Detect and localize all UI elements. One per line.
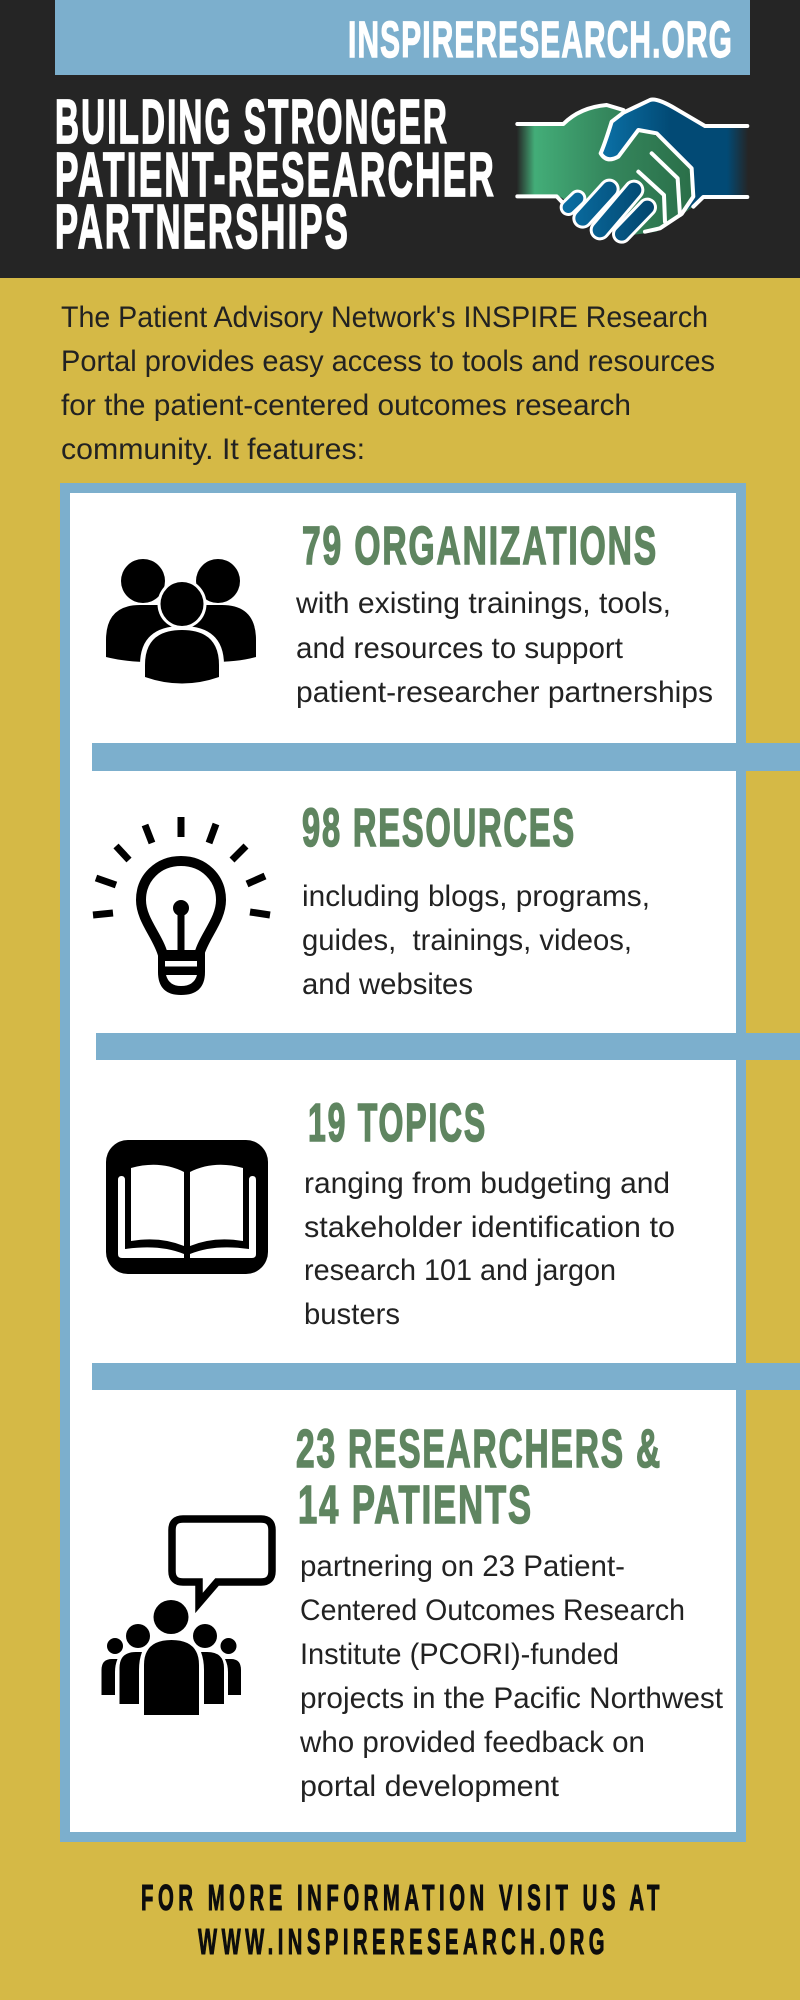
text: researchers description: Centered Outcomes Research <box>300 1594 685 1627</box>
intro text: for the patient-centered outcomes research <box>61 389 631 422</box>
text: topics description <box>304 1167 675 1331</box>
text: resources description: including blogs, programs, <box>302 880 650 913</box>
text: researchers description: who provided feedback on <box>299 1726 645 1759</box>
divider bar 2 <box>96 1033 800 1060</box>
text: resources description <box>302 880 650 1001</box>
text: resources description: and websites <box>302 968 473 1001</box>
heading: 19 topics: 19 TOPICS <box>308 1093 487 1153</box>
text: topics description: busters <box>304 1298 400 1331</box>
heading: 23 researchers and 14 patients: 14 PATIENTS <box>298 1475 533 1535</box>
text: researchers description <box>299 1550 724 1803</box>
website banner <box>55 0 750 75</box>
icon: open book <box>106 1140 268 1274</box>
text: researchers description: partnering on 23 Patient- <box>300 1550 625 1583</box>
text: organizations description: and resources to support <box>296 632 624 665</box>
panel: researchers and patients <box>102 1419 724 1803</box>
panel: features frame <box>60 483 746 1842</box>
text: topics description: ranging from budgeting and <box>304 1167 670 1200</box>
intro text: The Patient Advisory Network's INSPIRE Research <box>61 301 708 334</box>
heading: 23 researchers and 14 patients <box>296 1419 662 1535</box>
divider bar 1 <box>92 743 800 771</box>
title: BUILDING STRONGER <box>55 87 449 157</box>
intro text <box>61 301 715 466</box>
icon: group of three people <box>106 559 256 690</box>
text: topics description: stakeholder identification to <box>304 1211 675 1244</box>
text: researchers description: Institute (PCORI)-funded <box>300 1638 619 1671</box>
header band <box>0 0 800 278</box>
panel: organizations <box>106 516 713 709</box>
panel: resources <box>93 798 650 1001</box>
title <box>55 87 496 262</box>
text: researchers description: projects in the Pacific Northwest <box>300 1682 724 1715</box>
icon: handshake <box>517 100 748 237</box>
icon: light bulb <box>93 817 270 995</box>
text: organizations description <box>295 587 713 709</box>
heading: 98 resources: 98 RESOURCES <box>302 798 576 858</box>
text: resources description: guides, trainings, videos, <box>302 924 632 957</box>
panel: topics <box>106 1093 675 1331</box>
footer call to action <box>141 1877 664 1962</box>
text: organizations description: patient-researcher partnerships <box>296 676 713 709</box>
text: topics description: research 101 and jargon <box>304 1254 616 1287</box>
divider bar 3 <box>92 1363 800 1390</box>
title: PARTNERSHIPS <box>55 192 350 262</box>
text: organizations description: with existing trainings, tools, <box>295 587 671 620</box>
text: researchers description: portal development <box>300 1770 560 1803</box>
intro text: community. It features: <box>61 433 365 466</box>
intro text: Portal provides easy access to tools and resources <box>61 345 715 378</box>
icon: speaking group with speech bubble <box>102 1519 272 1715</box>
